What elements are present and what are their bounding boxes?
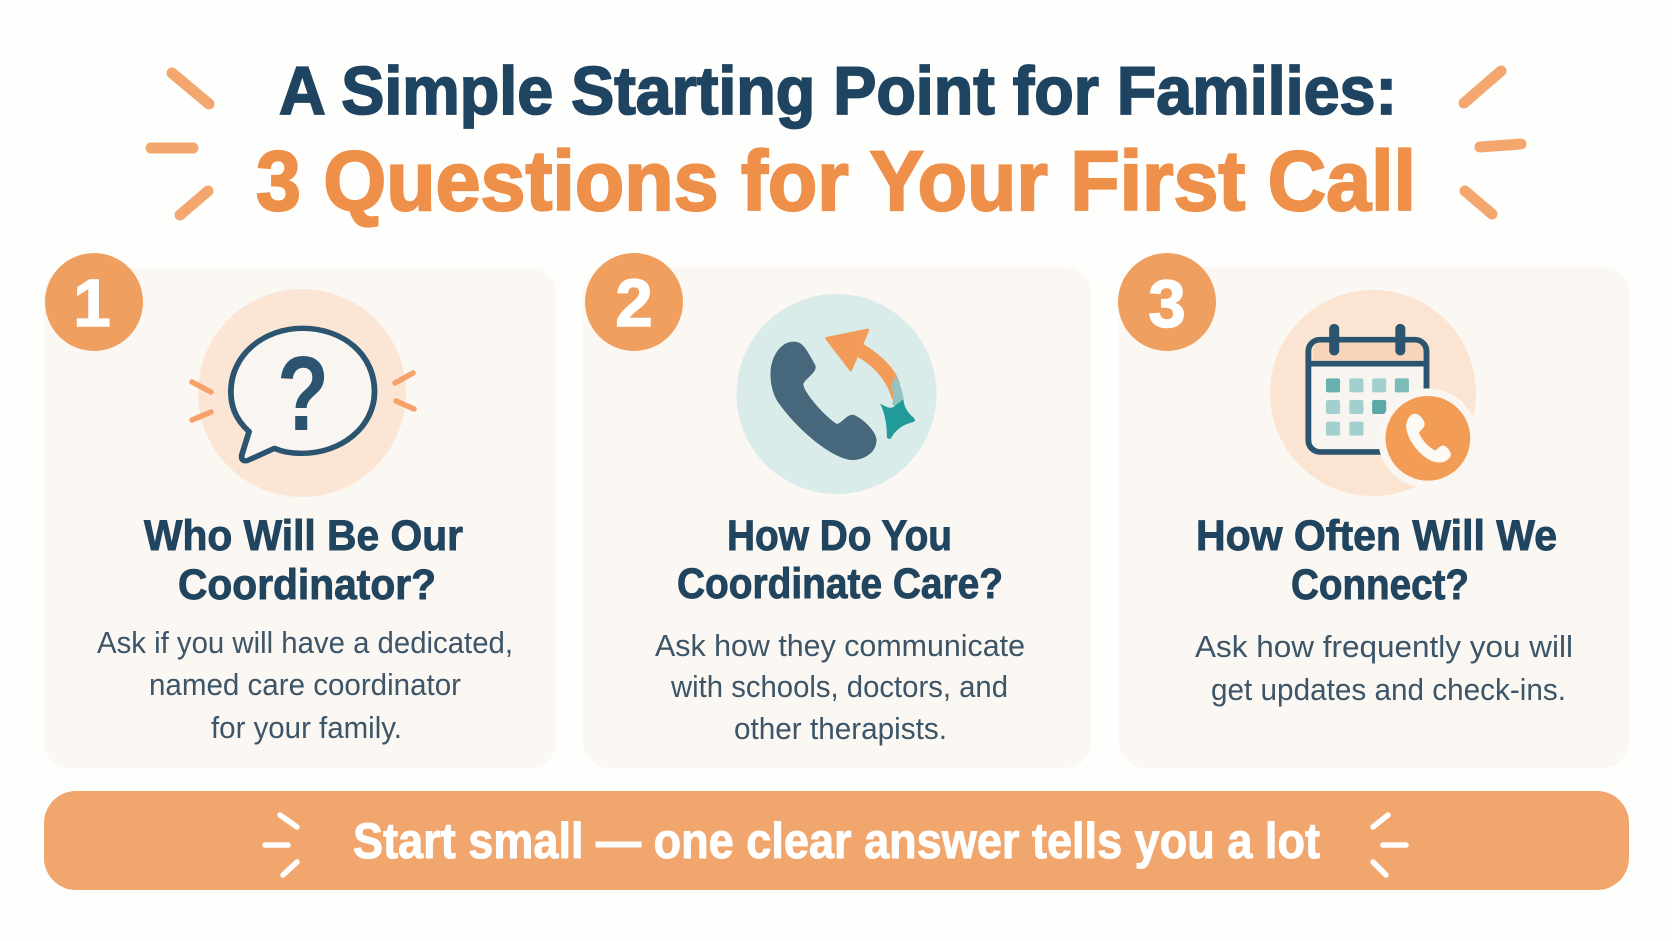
number badge 3 xyxy=(1118,253,1216,351)
icon: speech bubble with question mark: ? xyxy=(277,335,329,453)
title xyxy=(256,53,1416,228)
heading 2: Coordinate Care? xyxy=(677,560,1003,608)
card background 1 xyxy=(44,268,556,768)
title: 3 Questions for Your First Call xyxy=(256,134,1416,228)
number badge 3: 3 xyxy=(1148,267,1186,342)
body text 3: get updates and check-ins. xyxy=(1211,672,1566,707)
icon: speech bubble with question mark xyxy=(192,289,414,497)
body text 1: named care coordinator xyxy=(149,667,461,702)
number badge 1: 1 xyxy=(73,266,111,341)
heading 3 xyxy=(1196,512,1557,609)
body text 3: Ask how frequently you will xyxy=(1195,629,1573,664)
title sparks: right xyxy=(1464,71,1521,214)
title sparks: left xyxy=(151,73,209,215)
card background 3 xyxy=(1119,267,1629,768)
body text 2: with schools, doctors, and xyxy=(670,669,1008,704)
body text 2: other therapists. xyxy=(734,711,947,746)
panel: question 2 xyxy=(583,253,1091,768)
icon: phone with two-way arrows xyxy=(736,294,936,494)
heading 1 xyxy=(144,512,463,609)
banner sparks: left xyxy=(265,815,297,875)
body text 3 xyxy=(1195,629,1573,707)
icon: calendar with phone xyxy=(1270,290,1478,496)
heading 1: Coordinator? xyxy=(178,561,436,609)
number badge 2: 2 xyxy=(615,266,653,341)
body text 1: Ask if you will have a dedicated, xyxy=(97,625,513,660)
body text 2: Ask how they communicate xyxy=(655,628,1025,663)
heading 1: Who Will Be Our xyxy=(144,512,463,560)
title: A Simple Starting Point for Families: xyxy=(279,53,1397,129)
banner sparks: right xyxy=(1373,815,1406,875)
body text 1: for your family. xyxy=(211,710,402,745)
heading 2 xyxy=(677,512,1003,608)
panel: question 1 xyxy=(44,253,556,768)
number badge 1 xyxy=(45,253,143,351)
body text 2 xyxy=(655,628,1025,746)
body text 1 xyxy=(97,625,513,745)
card background 2 xyxy=(583,267,1091,768)
heading 3: Connect? xyxy=(1291,561,1469,609)
panel: question 3 xyxy=(1118,253,1629,768)
heading 2: How Do You xyxy=(727,512,952,560)
number badge 2 xyxy=(585,253,683,351)
banner xyxy=(44,791,1629,890)
heading 3: How Often Will We xyxy=(1196,512,1557,560)
banner text: Start small — one clear answer tells you a lot xyxy=(353,813,1320,869)
